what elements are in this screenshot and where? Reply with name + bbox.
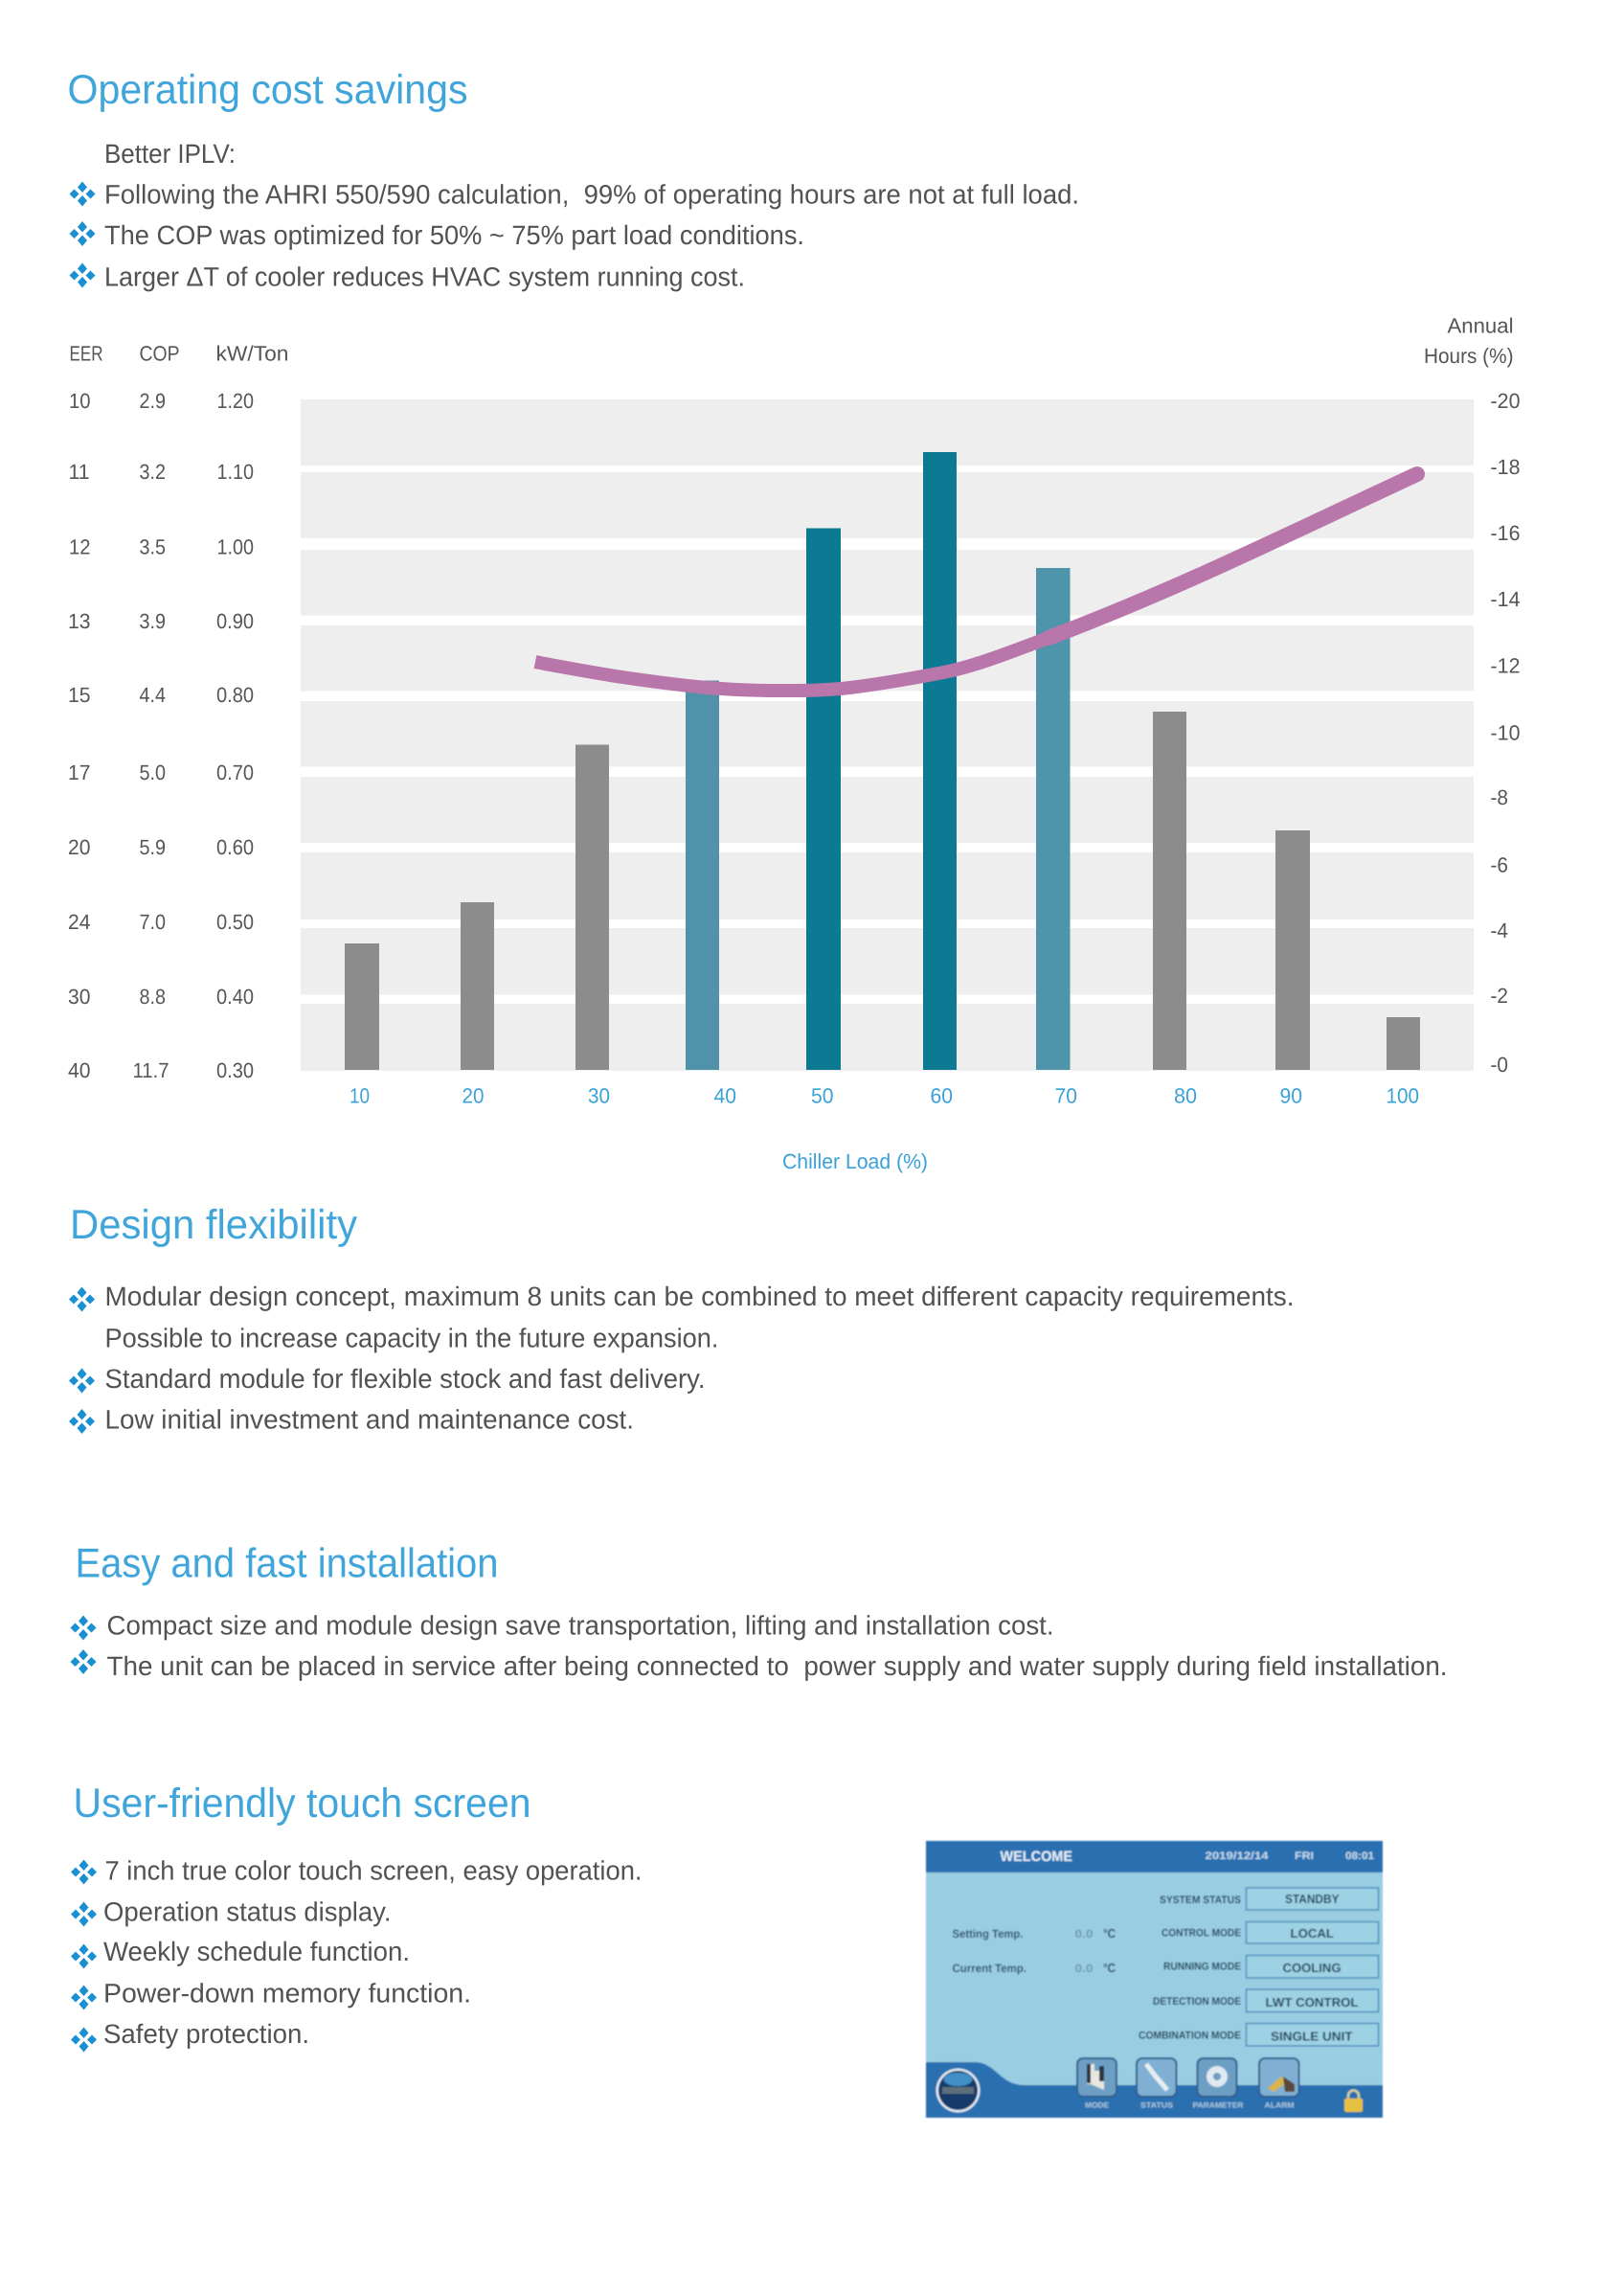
status labels: DETECTION MODE (1153, 1996, 1241, 2008)
status values: LOCAL (1291, 1926, 1334, 1941)
screen background (926, 1841, 1383, 2118)
heading: easy and fast installation: Easy and fast installation (75, 1540, 498, 1586)
left axis: EER column: 30 (68, 985, 90, 1009)
bullet list: installation points (71, 1611, 1448, 1681)
left axis: COP column: 8.8 (140, 985, 166, 1009)
x axis labels: 30 (588, 1084, 610, 1107)
left axis: COP column: 3.2 (140, 460, 166, 484)
temperature readouts: 0.0 (1074, 1962, 1094, 1975)
section: design flexibility (69, 1202, 1295, 1435)
heading: user-friendly touch screen: User-friendly touch screen (73, 1781, 530, 1827)
x axis labels: 70 (1055, 1084, 1077, 1107)
x axis labels: 50 (811, 1084, 833, 1107)
status value boxes (1247, 1888, 1379, 2046)
left axis: EER column (68, 341, 103, 1082)
left axis: kW/Ton column (216, 341, 289, 1082)
status labels: RUNNING MODE (1163, 1962, 1241, 1973)
section: operating cost savings (67, 67, 1079, 291)
header text: 2019/12/14 (1205, 1850, 1270, 1862)
header text: FRI (1295, 1850, 1314, 1862)
left axis: EER column: 24 (68, 910, 90, 934)
left axis: COP column: 11.7 (132, 1058, 169, 1082)
left axis: kW/Ton column: 0.60 (216, 835, 254, 859)
touch screen interface image (926, 1841, 1383, 2118)
temperature readouts (952, 1926, 1116, 1975)
curve: kW/Ton efficiency (535, 474, 1417, 691)
icon: mode (1077, 2058, 1116, 2097)
header text: WELCOME (1000, 1849, 1072, 1865)
left axis: kW/Ton column: 0.30 (216, 1058, 254, 1082)
bullet list: design points: Modular design concept, maximum 8 units can be combined to meet different capacity requirements. (105, 1282, 1295, 1311)
text: better IPLV: Better IPLV: (104, 139, 236, 169)
icon: lock (1344, 2091, 1363, 2112)
x axis labels: 90 (1279, 1084, 1302, 1107)
bullet list: IPLV points: The COP was optimized for 50% ~ 75% part load conditions. (104, 220, 804, 250)
x axis labels: 100 (1387, 1084, 1419, 1107)
left axis: COP column (132, 341, 180, 1082)
chart: chiller load vs efficiency and annual hours (68, 314, 1521, 1173)
x axis labels: 10 (350, 1084, 370, 1107)
left axis: kW/Ton column: 0.70 (216, 760, 254, 784)
right axis: annual hours: Annual (1448, 314, 1513, 337)
right axis: annual hours: -10 (1490, 720, 1521, 745)
icon labels (1085, 2101, 1295, 2109)
bars: annual hours by load (345, 452, 1420, 1070)
left axis: kW/Ton column: 1.20 (216, 389, 254, 413)
left axis: EER column: 10 (69, 389, 90, 413)
icon: parameter (1197, 2058, 1237, 2097)
right axis: annual hours (1424, 314, 1521, 1077)
temperature readouts: 0.0 (1074, 1927, 1094, 1941)
bullet list: IPLV points (69, 180, 1079, 291)
left axis: EER column: 17 (68, 760, 90, 784)
header text (1000, 1849, 1374, 1865)
bullet list: touch screen points: Power-down memory function. (103, 1979, 471, 2008)
left axis: EER column: 11 (69, 460, 90, 484)
temperature readouts: Setting Temp. (952, 1927, 1023, 1941)
heading: operating cost savings: Operating cost savings (67, 67, 467, 113)
left axis: EER column: 13 (68, 609, 90, 633)
left axis: kW/Ton column: 0.80 (216, 683, 254, 707)
left axis: COP column: 4.4 (140, 683, 166, 707)
left axis: kW/Ton column: 0.50 (216, 910, 254, 934)
icon labels: STATUS (1140, 2101, 1174, 2109)
status labels: CONTROL MODE (1162, 1927, 1241, 1939)
status values: LWT CONTROL (1266, 1995, 1359, 2009)
x axis labels: 80 (1174, 1084, 1197, 1107)
screen header bar (926, 1841, 1383, 1873)
bullet list: touch screen points (71, 1856, 642, 2052)
logo badge (936, 2069, 981, 2113)
left axis: kW/Ton column: 0.90 (216, 609, 254, 633)
bullet list: design points: Standard module for flexible stock and fast delivery. (105, 1364, 705, 1394)
bullet list: design points: Low initial investment and maintenance cost. (105, 1404, 634, 1435)
x axis labels (350, 1084, 1419, 1107)
status labels: COMBINATION MODE (1139, 2031, 1241, 2042)
status values: STANDBY (1285, 1892, 1340, 1906)
bullet list: touch screen points: 7 inch true color touch screen, easy operation. (105, 1856, 642, 1885)
x axis labels: 20 (462, 1084, 485, 1107)
left axis: EER column: 40 (68, 1058, 90, 1082)
right axis: annual hours: -0 (1490, 1053, 1508, 1077)
bullet list: touch screen points: Safety protection. (103, 2019, 309, 2049)
bullet list: installation points: Compact size and module design save transportation, lifting and installation cost. (107, 1611, 1053, 1640)
right axis: annual hours: -12 (1490, 653, 1521, 678)
temperature readouts: °C (1103, 1961, 1116, 1975)
left axis: kW/Ton column: 1.10 (216, 460, 254, 484)
left axis: COP column: 5.0 (140, 760, 166, 784)
left axis: kW/Ton column: kW/Ton (216, 341, 289, 366)
right axis: annual hours: -18 (1490, 455, 1521, 479)
x axis title: Chiller Load (%) (782, 1149, 928, 1173)
left axis: EER column: 20 (68, 835, 90, 859)
left axis: EER column: 12 (69, 534, 90, 559)
left axis: COP column: COP (140, 341, 180, 366)
x axis labels: 60 (931, 1084, 953, 1107)
left axis: COP column: 3.5 (140, 534, 166, 559)
bullet list: design points (69, 1282, 1295, 1435)
icon: alarm (1259, 2058, 1298, 2097)
status values: COOLING (1283, 1961, 1341, 1975)
temperature readouts: Current Temp. (952, 1962, 1026, 1975)
bullet list: touch screen points: Weekly schedule function. (103, 1937, 410, 1966)
bullet list: IPLV points: Larger ΔT of cooler reduces HVAC system running cost. (104, 262, 745, 291)
header text: 08:01 (1345, 1850, 1374, 1862)
screen footer bar (926, 2062, 1383, 2118)
left axis: COP column: 2.9 (140, 389, 166, 413)
heading: design flexibility: Design flexibility (70, 1202, 357, 1248)
bullet list: IPLV points: Following the AHRI 550/590 calculation, 99% of operating hours are not at full load. (104, 180, 1079, 209)
right axis: annual hours: -20 (1490, 389, 1521, 413)
left axis: COP column: 7.0 (140, 910, 166, 934)
status labels (1139, 1895, 1241, 2042)
bullet list: design points: Possible to increase capacity in the future expansion. (105, 1324, 718, 1352)
left axis: EER column: EER (69, 341, 103, 366)
icon labels: PARAMETER (1193, 2101, 1244, 2109)
plot background bands (301, 399, 1474, 1071)
icon labels: ALARM (1264, 2101, 1295, 2109)
status labels: SYSTEM STATUS (1160, 1895, 1241, 1906)
section: user-friendly touch screen (71, 1781, 642, 2052)
right axis: annual hours: -16 (1490, 521, 1521, 545)
bullet list: installation points: The unit can be placed in service after being connected to power supply and water supply during field installation. (107, 1651, 1448, 1681)
right axis: annual hours: -4 (1490, 919, 1508, 942)
status values (1266, 1892, 1359, 2044)
icon labels: MODE (1085, 2101, 1110, 2109)
right axis: annual hours: Hours (%) (1424, 344, 1513, 368)
status values: SINGLE UNIT (1271, 2029, 1353, 2044)
right axis: annual hours: -8 (1490, 785, 1508, 809)
left axis: kW/Ton column: 1.00 (216, 534, 254, 559)
x axis labels: 40 (714, 1084, 736, 1107)
section: easy and fast installation (71, 1540, 1448, 1681)
right axis: annual hours: -14 (1490, 587, 1521, 611)
icon: status (1137, 2058, 1176, 2097)
right axis: annual hours: -6 (1490, 852, 1508, 877)
left axis: kW/Ton column: 0.40 (216, 985, 254, 1009)
right axis: annual hours: -2 (1490, 984, 1508, 1008)
left axis: EER column: 15 (68, 683, 90, 707)
left axis: COP column: 5.9 (140, 835, 166, 859)
bullet list: touch screen points: Operation status display. (103, 1896, 391, 1927)
temperature readouts: °C (1103, 1926, 1116, 1941)
left axis: COP column: 3.9 (140, 609, 166, 633)
